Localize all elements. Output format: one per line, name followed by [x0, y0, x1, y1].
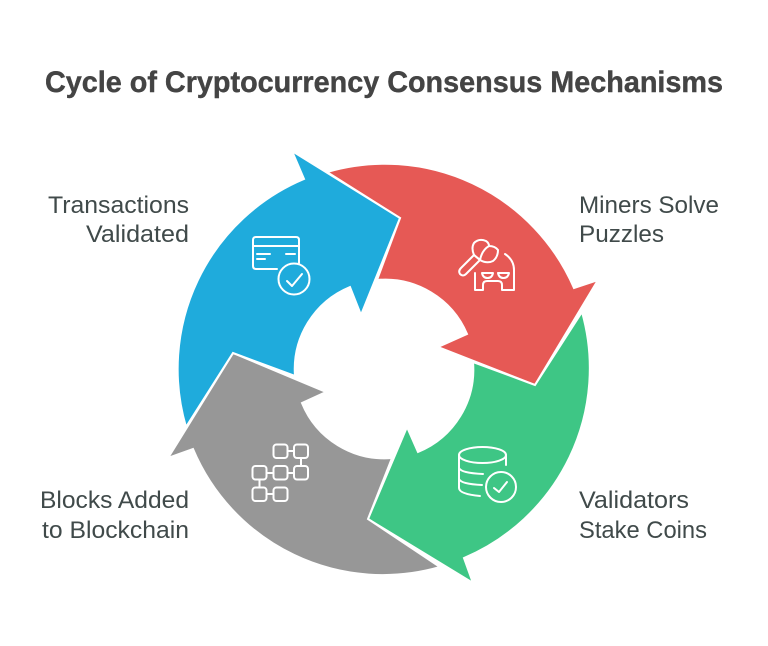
icon: credit card with check: [253, 237, 310, 294]
label: Transactions Validated: Validated: [86, 221, 189, 248]
icon: mining axe and mine: [459, 240, 514, 290]
cycle diagram: [168, 151, 598, 583]
arrow segment: red: [327, 164, 598, 385]
label: Validators Stake Coins: Validators: [579, 487, 689, 514]
label: Blocks Added to Blockchain: to Blockchain: [42, 517, 189, 544]
label: Transactions Validated: [48, 192, 189, 248]
label: Blocks Added to Blockchain: Blocks Added: [40, 487, 189, 514]
label: Miners Solve Puzzles: [579, 192, 719, 248]
arrow segment: blue: [178, 151, 400, 427]
label: Transactions Validated: Transactions: [48, 192, 189, 219]
title: Cycle of Cryptocurrency Consensus Mechanisms: [45, 66, 723, 99]
icon: database with check: [459, 447, 516, 502]
label: Blocks Added to Blockchain: [40, 487, 189, 544]
icon: blockchain blocks: [252, 444, 308, 501]
label: Validators Stake Coins: [579, 487, 707, 544]
arrow segment: gray: [168, 353, 440, 575]
label: Miners Solve Puzzles: Puzzles: [579, 221, 664, 248]
label: Miners Solve Puzzles: Miners Solve: [579, 192, 719, 219]
label: Validators Stake Coins: Stake Coins: [579, 517, 707, 544]
arrow segment: green: [368, 312, 590, 583]
